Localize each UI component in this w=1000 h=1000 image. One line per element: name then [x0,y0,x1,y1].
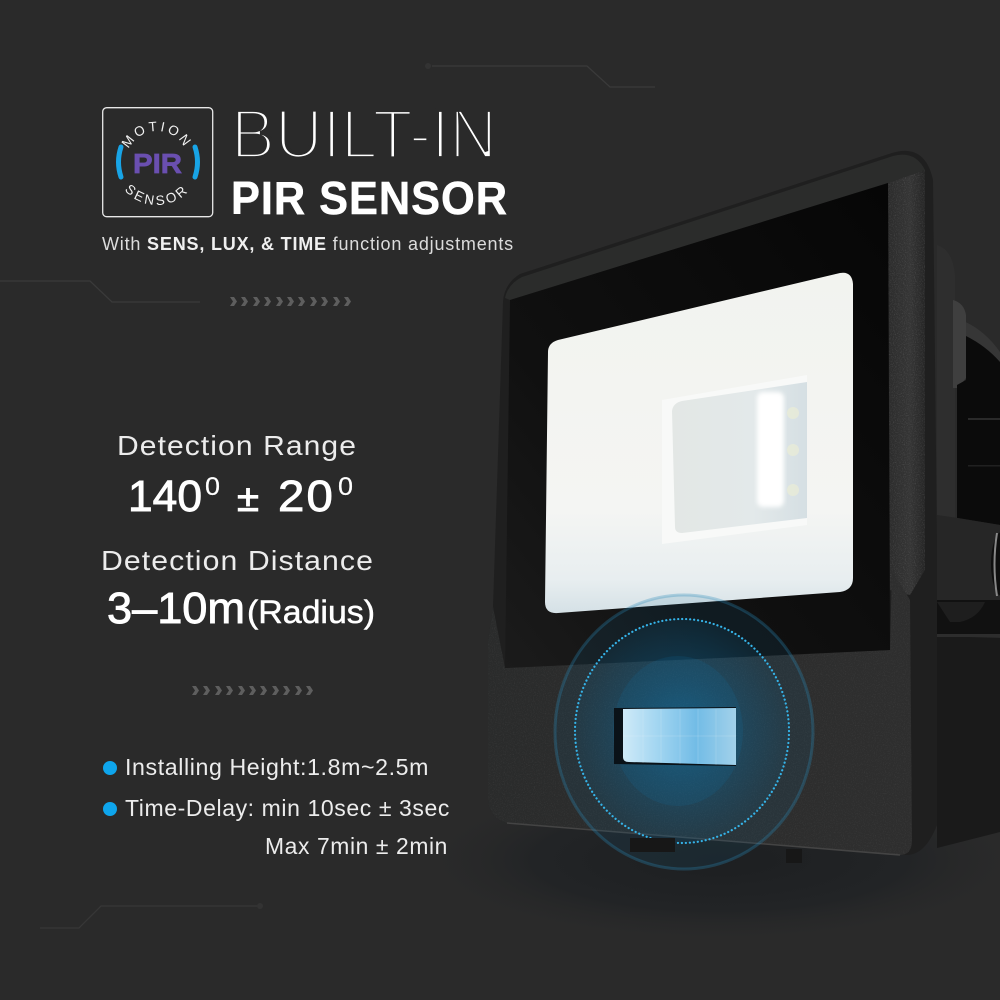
icon: PIR motion sensor badge [102,107,214,218]
lens surround [662,375,807,544]
chevron row middle [192,686,313,695]
bullet: installing height: Installing Height:1.8m~2.5m [125,754,429,780]
lamp shadow [410,775,1000,945]
badge label PIR: PIR [133,148,182,179]
sensor window [614,707,736,766]
LED lens [672,382,807,533]
badge blue brackets [118,147,198,177]
detection glow circles [555,595,813,869]
bullet: time delay: Time-Delay: min 10sec ± 3sec [125,795,450,821]
floodlight product [485,151,1000,869]
LED bright strip [757,392,784,507]
badge text: sensor: SENSOR [126,185,188,205]
heading: built-in: BUILT-IN [231,95,497,173]
heading: PIR sensor: PIR SENSOR [231,172,508,224]
detection range value: 20 [278,472,335,521]
lamp outer frame [488,151,937,855]
decorative circuit line left [0,281,200,302]
detection range value: 0 [205,473,220,501]
plate bottom lip [507,823,900,855]
white reflector [545,273,853,613]
mounting feet [630,838,802,863]
bottom plate [488,570,912,855]
chevron row top [230,297,351,306]
detection range value: ± [237,478,259,520]
detection distance value [107,584,375,633]
decorative circuit line bottom [40,903,263,928]
rear housing [937,245,1000,848]
black front panel [505,183,890,668]
bullet: time delay: Max 7min ± 2min [265,833,448,859]
badge text: motion: MOTION [121,122,191,148]
LED chips [787,407,799,496]
detection distance value: 3–10m [107,584,245,633]
detection range value: 140 [128,472,202,521]
detection distance value: (Radius) [247,594,375,630]
subtitle: With SENS, LUX, & TIME function adjustments [102,234,514,254]
detection range label: Detection Range [117,430,357,461]
top bezel [505,155,925,300]
bullet: time delay [103,795,450,859]
detection distance label: Detection Distance [101,545,374,576]
detection range value [128,472,353,521]
detection range value: 0 [338,473,353,501]
right textured bezel [888,170,925,595]
decorative circuit line top [425,63,655,87]
